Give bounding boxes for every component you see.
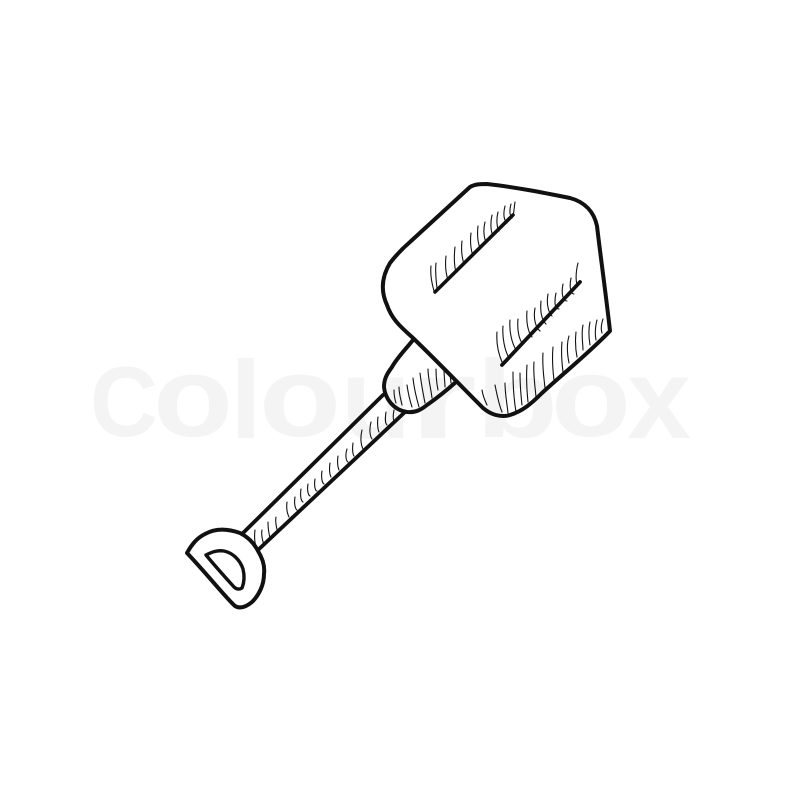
watermark text: C (90, 346, 158, 457)
hatching: upper slot (431, 202, 515, 291)
handle grip (187, 530, 264, 607)
hatching: blade bottom edge (482, 319, 603, 413)
watermark text: x (627, 336, 691, 463)
blade slot: lower (502, 282, 580, 365)
watermark text: r (409, 336, 477, 463)
watermark text: o (259, 334, 341, 461)
collar (384, 340, 456, 412)
watermark text (90, 334, 691, 463)
blade slot: upper (435, 215, 513, 292)
watermark text: u (341, 336, 411, 463)
watermark text: l (230, 339, 262, 462)
hatching: collar (394, 369, 451, 407)
icon: shovel (187, 184, 610, 607)
handle shaft (242, 395, 405, 550)
shovel blade outline (383, 184, 610, 416)
hatching: shaft (255, 410, 394, 546)
hatching: lower slot (497, 263, 578, 362)
watermark text: b (476, 338, 558, 461)
watermark text: o (153, 334, 233, 461)
watermark text: o (551, 334, 631, 461)
grip opening (206, 551, 244, 589)
